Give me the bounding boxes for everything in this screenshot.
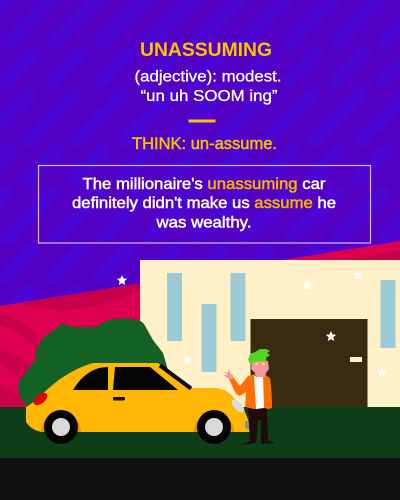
stars — [117, 270, 387, 377]
legs — [241, 407, 275, 445]
mnemonic line: THINK: un-assume. — [132, 135, 277, 153]
side window — [113, 367, 178, 390]
door handle — [113, 397, 125, 400]
definition text: (adjective): modest. — [134, 68, 282, 86]
yellow car — [26, 363, 252, 444]
definition text: “un uh SOOM ing” — [140, 88, 278, 105]
rear window — [73, 367, 108, 390]
man waving — [223, 349, 275, 445]
front wheel — [194, 410, 234, 444]
ground — [0, 407, 400, 458]
face — [251, 361, 269, 377]
road — [0, 458, 400, 500]
example sentence box — [38, 166, 370, 243]
definition text — [134, 68, 282, 105]
tail light — [31, 390, 50, 408]
rear wheel — [41, 410, 81, 444]
example sentence box: The millionaire's unassuming car — [82, 176, 326, 193]
example sentence box: definitely didn't make us assume he — [72, 195, 336, 212]
hand — [223, 369, 233, 379]
jacket — [229, 374, 272, 409]
headlight — [230, 398, 246, 414]
windshield — [160, 366, 191, 388]
yellow divider dash — [188, 120, 216, 122]
bumper — [245, 421, 252, 431]
title: UNASSUMING — [140, 40, 272, 61]
example sentence box: was wealthy. — [155, 214, 252, 232]
green bush — [18, 318, 168, 406]
eyes — [255, 363, 265, 365]
pink hill with waves — [0, 241, 400, 407]
shirt — [254, 376, 264, 409]
hair — [248, 349, 270, 365]
building — [140, 260, 400, 407]
